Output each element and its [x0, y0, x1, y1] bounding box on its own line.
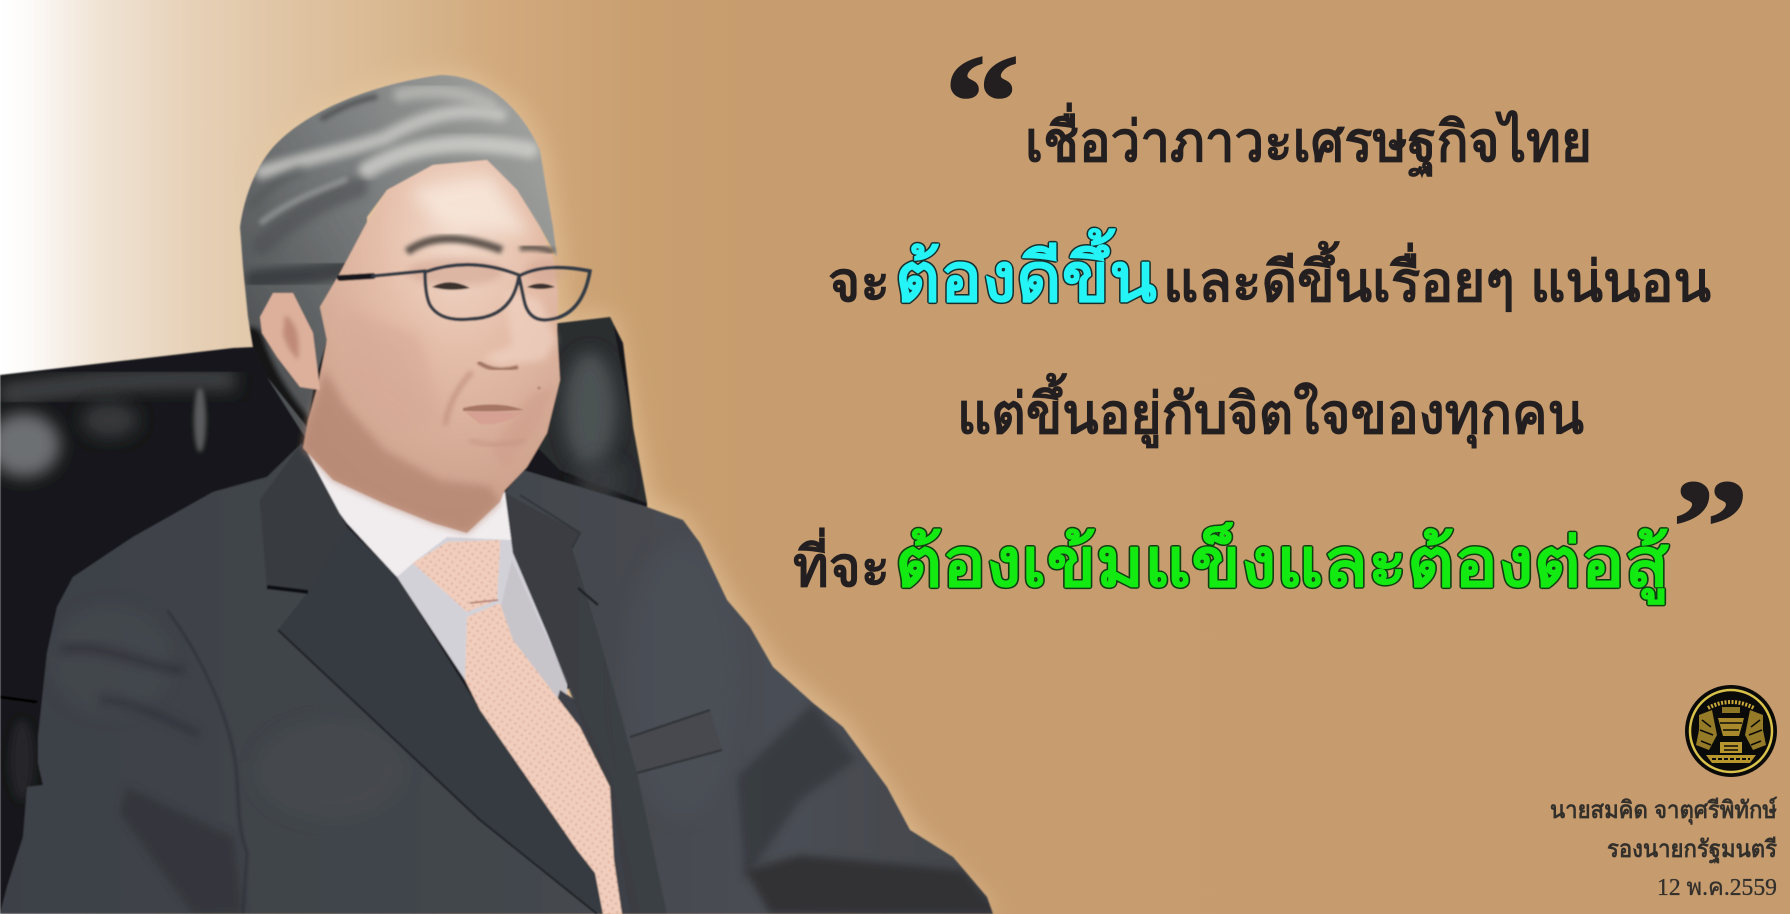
highlighted green words: ต้องเข้มแข็งและต้องต่อสู้	[895, 522, 1670, 606]
name: นายสมคิด จาตุศรีพิทักษ์	[1550, 796, 1778, 826]
pocket	[630, 710, 722, 773]
chair	[0, 317, 650, 914]
quote line 4: ที่จะ	[793, 527, 890, 598]
opening quotation mark: “	[944, 28, 1020, 177]
closing quotation mark: ”	[1672, 453, 1749, 602]
signature text block	[1550, 796, 1778, 901]
quote line 2: และดีขึ้นเรื่อยๆ แน่นอน	[1163, 241, 1711, 313]
ear	[260, 293, 320, 390]
person glow halo	[260, 75, 993, 914]
quote line 4	[793, 522, 1670, 606]
neck and face	[303, 160, 560, 533]
portrait: man in suit seated on leather chair	[0, 75, 1000, 914]
suit jacket	[0, 443, 1000, 914]
sleeve highlights and folds	[255, 720, 405, 820]
hair	[240, 75, 557, 440]
position: รองนายกรัฐมนตรี	[1607, 836, 1777, 865]
left lapel	[260, 443, 603, 914]
shirt	[303, 448, 567, 707]
highlighted cyan words: ต้องดีขึ้น	[895, 227, 1157, 316]
icon: government seal	[1685, 685, 1777, 777]
necktie	[413, 540, 622, 914]
eyebrows, eyes, nose and lips	[407, 239, 555, 424]
face shading	[303, 175, 565, 533]
date: 12 พ.ค.2559	[1657, 875, 1777, 901]
right arm folds	[737, 703, 855, 880]
quote line 2	[828, 227, 1711, 316]
quote line 1: เชื่อว่าภาวะเศรษฐกิจไทย	[1025, 102, 1592, 178]
jacket front strip	[505, 493, 667, 914]
quote text block	[793, 28, 1749, 606]
lapel slit	[578, 588, 598, 605]
eyeglasses	[340, 265, 590, 320]
quote line 2: จะ	[828, 250, 890, 313]
jacket panel behind necktie	[540, 690, 640, 914]
quote line 3: แต่ขึ้นอยู่กับจิตใจของทุกคน	[957, 373, 1584, 449]
